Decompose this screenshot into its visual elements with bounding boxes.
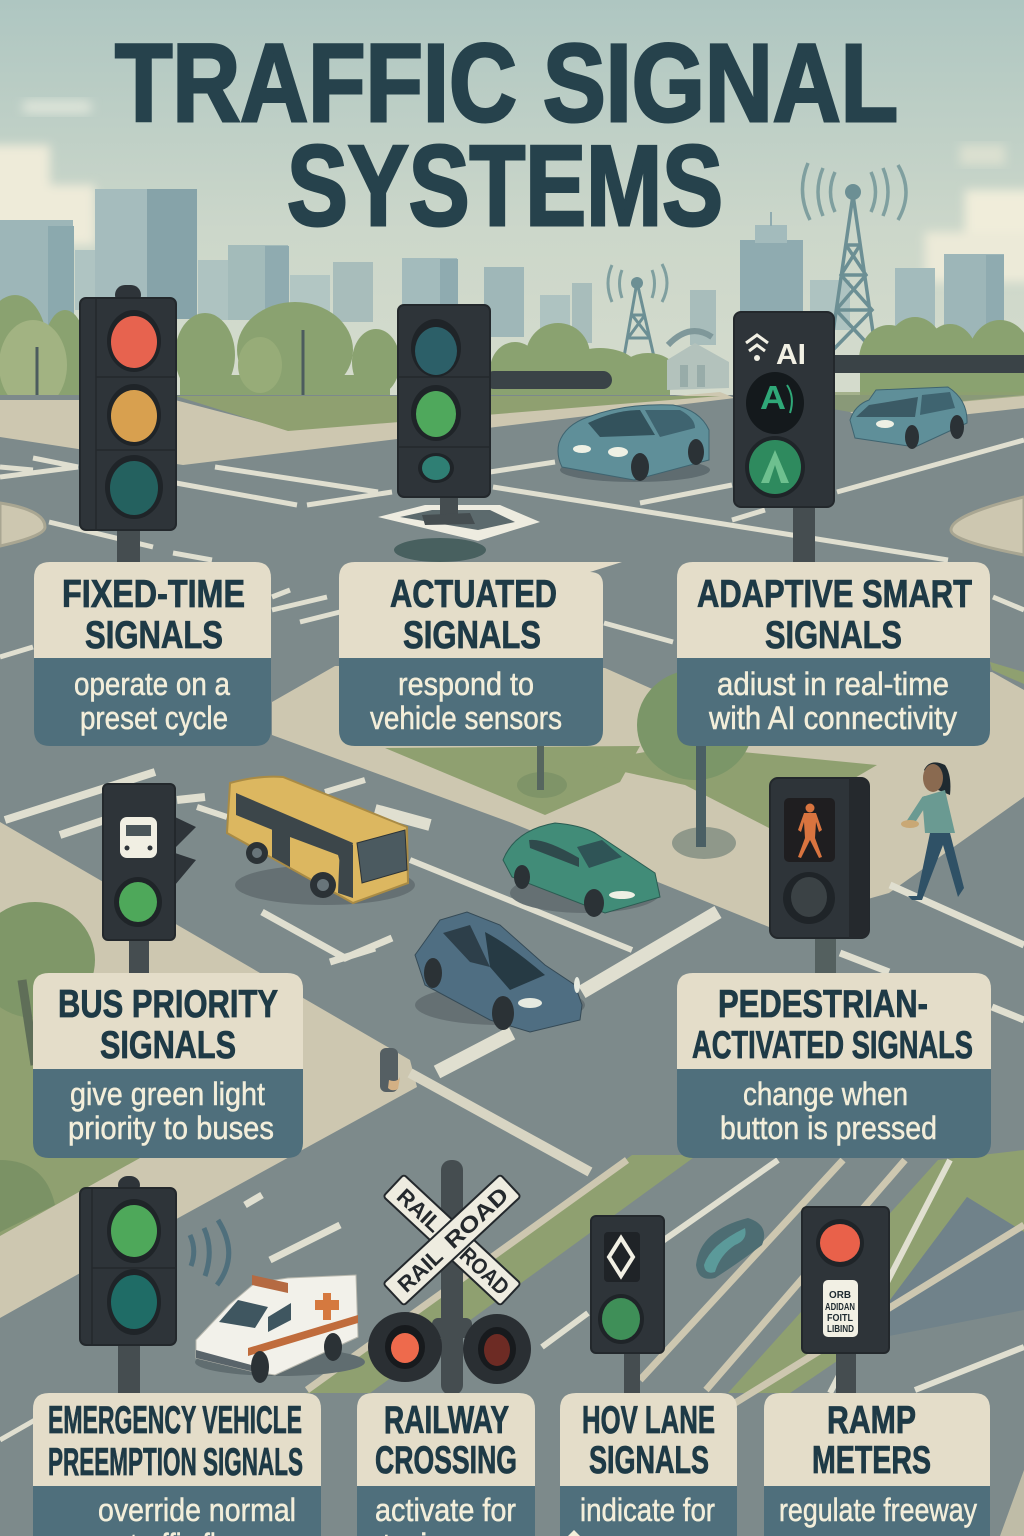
background: lamp posts	[37, 330, 303, 428]
background: roadway	[0, 395, 1024, 1536]
icon: railroad crossbuck: ROAD	[439, 1182, 514, 1254]
icon: teal road arrow marking	[696, 1218, 764, 1279]
panel: actuated signals	[339, 562, 622, 746]
panel: adaptive smart signals: adiust in real-time	[717, 666, 949, 702]
icon: railroad crossbuck: ROAD	[455, 1242, 514, 1300]
panel: HOV lane signals: HOV LANE	[582, 1399, 715, 1442]
panel: pedestrian-activated signals: button is pressed	[720, 1110, 937, 1146]
panel: fixed-time signals: operate on a	[74, 666, 230, 702]
panel: railway crossing: RAILWAY	[384, 1399, 509, 1442]
signal: pedestrian	[770, 778, 869, 975]
icon: railroad crossbuck: RAIL	[392, 1183, 447, 1237]
title: SYSTEMS	[287, 123, 723, 250]
car: blue sedan far	[558, 405, 710, 482]
signal: actuated with sensor loop	[378, 305, 612, 562]
panel: ramp meters: METERS	[812, 1439, 931, 1482]
ramp sign text: ADIDAN	[825, 1302, 855, 1313]
panel: actuated signals: ACTUATED	[390, 573, 557, 616]
signal: bus priority	[103, 784, 196, 975]
signal: adaptive smart: AI	[776, 339, 806, 371]
panel: emergency vehicle preemption signals: override normal	[98, 1492, 296, 1528]
signal: HOV lane	[591, 1216, 664, 1396]
panel: emergency vehicle preemption signals: PREEMPTION SIGNALS	[48, 1441, 303, 1484]
panel: actuated signals: SIGNALS	[403, 614, 541, 657]
panel: bus priority signals: BUS PRIORITY	[58, 983, 278, 1026]
ramp sign text: FOITL	[827, 1313, 853, 1324]
panel: adaptive smart signals: SIGNALS	[765, 614, 902, 657]
ambulance	[195, 1275, 365, 1383]
panel: bus priority signals: SIGNALS	[100, 1024, 236, 1067]
panel: HOV lane signals: indicate for	[580, 1492, 715, 1528]
icon: emergency signal waves	[190, 1220, 229, 1285]
background: blocks and sidewalks	[0, 392, 1024, 1536]
icon: railroad crossbuck: RAIL	[393, 1243, 448, 1297]
panel: fixed-time signals	[34, 562, 271, 746]
icon: pedestrian button post	[380, 1048, 400, 1092]
panel: bus priority signals: priority to buses	[68, 1110, 274, 1146]
ramp sign text: ORB	[829, 1290, 851, 1301]
panel: bus priority signals	[33, 973, 303, 1158]
panel: actuated signals: respond to	[398, 666, 534, 702]
ramp sign text	[823, 1280, 858, 1337]
panel: railway crossing: activate for	[375, 1492, 516, 1528]
panel: HOV lane signals: SIGNALS	[589, 1439, 709, 1482]
panel: fixed-time signals: SIGNALS	[85, 614, 223, 657]
title	[115, 22, 898, 250]
signal: adaptive smart	[734, 312, 1024, 565]
panel: fixed-time signals: FIXED-TIME	[62, 573, 245, 616]
background: distant house	[667, 331, 729, 390]
panel: actuated signals: vehicle sensors	[370, 700, 562, 736]
panel: pedestrian-activated signals	[677, 973, 991, 1158]
panel: adaptive smart signals	[677, 562, 990, 746]
panel: HOV lane signals	[560, 1393, 737, 1536]
background: lane markings	[0, 440, 1024, 1440]
icon: railroad crossbuck	[383, 1174, 521, 1306]
signal: fixed-time	[80, 285, 176, 565]
signal: railway crossing	[368, 1160, 531, 1395]
panel: adaptive smart signals: with AI connectivity	[708, 700, 957, 736]
signal: adaptive smart: A	[760, 379, 786, 416]
car: blue sedan near	[415, 912, 585, 1032]
icon: small radio tower	[608, 264, 667, 357]
background: sky	[0, 0, 1024, 420]
signal: ramp meter	[802, 1207, 889, 1396]
panel: emergency vehicle preemption signals	[33, 1393, 321, 1536]
background: city skyline	[0, 189, 1004, 345]
ramp sign text: LIBIND	[827, 1324, 854, 1335]
panel: pedestrian-activated signals: change when	[743, 1076, 908, 1112]
title: TRAFFIC SIGNAL	[115, 22, 898, 145]
panel: ramp meters: regulate freeway	[779, 1492, 977, 1528]
background: tree line	[0, 295, 1024, 410]
icon: large radio tower	[802, 163, 906, 353]
panel: fixed-time signals: preset cycle	[80, 700, 228, 736]
car: blue hatchback far	[850, 387, 967, 449]
panel: pedestrian-activated signals: PEDESTRIAN-	[718, 983, 928, 1026]
panel: railway crossing	[357, 1393, 535, 1536]
panel: ramp meters: RAMP	[827, 1399, 916, 1442]
panel: emergency vehicle preemption signals: EMERGENCY VEHICLE	[48, 1399, 302, 1442]
panel: railway crossing: CROSSING	[375, 1439, 517, 1482]
car: green sedan	[503, 823, 660, 917]
pedestrian	[901, 762, 964, 900]
background: street trees	[0, 670, 753, 1065]
panel: ramp meters	[764, 1393, 990, 1536]
bus	[227, 777, 415, 905]
signal: emergency preemption	[80, 1176, 176, 1396]
panel: bus priority signals: give green light	[70, 1076, 265, 1112]
